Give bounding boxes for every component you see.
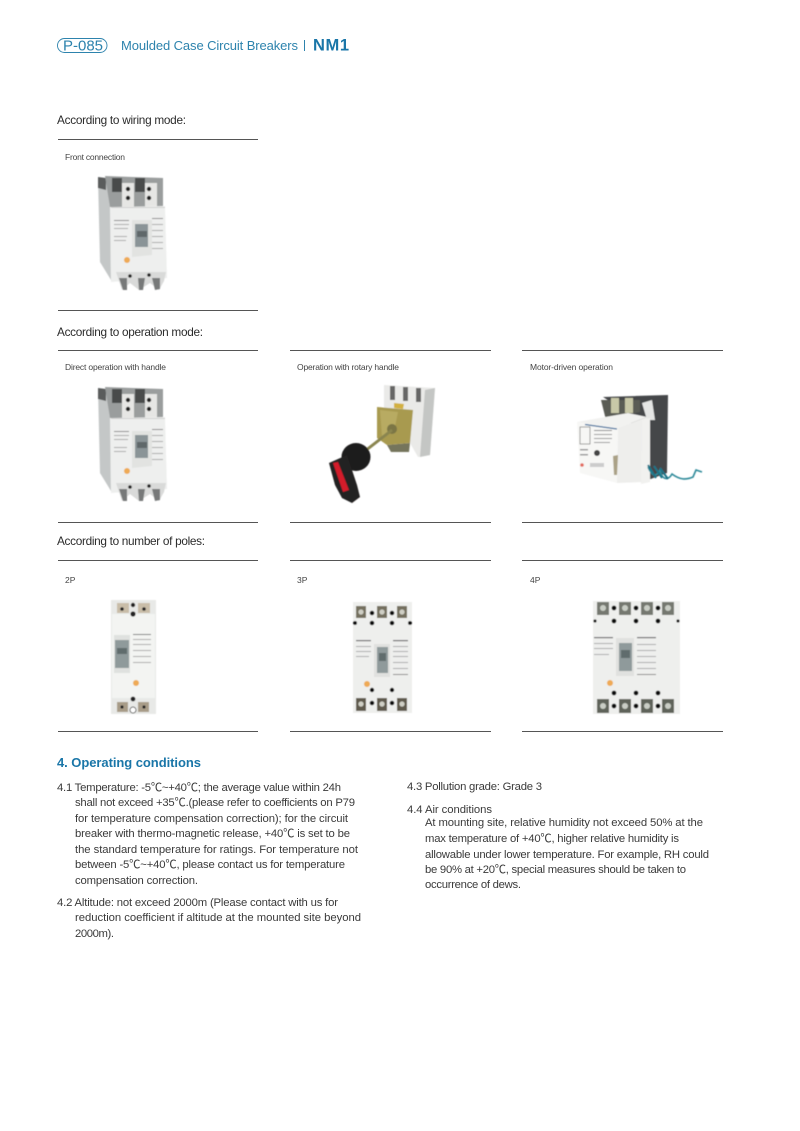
text block: conditions 4.2: 4.2 Altitude: not exceed 2000m (Please contact with us for <box>57 897 338 909</box>
text block: conditions 4.1: 4.1 Temperature: -5℃~+40℃; the average value within 24h <box>57 782 341 794</box>
text block: conditions 4.1: for temperature compensation correction); for the circuit <box>75 813 349 825</box>
page header: NM1 <box>313 36 349 54</box>
panel: front connection <box>58 140 258 310</box>
text block: conditions 4.4: max temperature of +40℃, higher relative humidity is <box>425 833 679 845</box>
text block: conditions 4.3: 4.3 Pollution grade: Grade 3 <box>407 781 542 793</box>
icon: motor-driven breaker <box>577 395 702 484</box>
panel: 3P <box>290 560 491 732</box>
page header <box>58 36 349 54</box>
panel: direct operation with handle <box>58 350 258 522</box>
icon: 2-pole breaker <box>111 600 156 714</box>
heading: wiring mode: According to wiring mode: <box>57 113 186 127</box>
panel: 4P: 4P <box>530 575 541 585</box>
text block: conditions 4.1: breaker with thermo-magnetic release, +40℃ is set to be <box>75 828 350 840</box>
icon: handle-operated breaker <box>98 387 167 501</box>
text block: conditions 4.2: reduction coefficient if altitude at the mounted site beyond <box>75 912 361 924</box>
text block: conditions 4.1: between -5℃~+40℃, please contact us for temperature <box>75 859 345 871</box>
heading: number of poles: According to number of poles: <box>57 534 205 548</box>
icon: 3-pole breaker <box>353 602 412 713</box>
panel: 2P <box>58 560 258 732</box>
text block: conditions 4.1: shall not exceed +35℃.(please refer to coefficients on P79 <box>75 797 355 809</box>
text block: conditions 4.1 <box>57 782 359 887</box>
section heading: operating conditions: 4. Operating conditions <box>57 755 201 770</box>
text block: conditions 4.2: 2000m). <box>75 928 114 940</box>
text block: conditions 4.1: the standard temperature for ratings. For temperature not <box>75 844 359 856</box>
page header: Moulded Case Circuit Breakers <box>121 38 298 53</box>
text block: conditions 4.2 <box>57 897 361 940</box>
heading: operation mode: According to operation mode: <box>57 325 203 339</box>
text block: conditions 4.4: At mounting site, relative humidity not exceed 50% at the <box>425 817 703 829</box>
text block: conditions 4.4: occurrence of dews. <box>425 879 521 891</box>
icon: front connection breaker <box>98 176 167 290</box>
panel: 3P: 3P <box>297 575 308 585</box>
panel: motor-driven operation: Motor-driven operation <box>530 362 613 372</box>
panel: direct operation with handle: Direct operation with handle <box>65 362 166 372</box>
panel: operation with rotary handle <box>290 350 491 522</box>
panel: 2P: 2P <box>65 575 76 585</box>
panel: front connection: Front connection <box>65 152 125 162</box>
panel: motor-driven operation <box>522 350 723 522</box>
text block: conditions 4.4: 4.4 Air conditions <box>407 804 492 816</box>
text block: conditions 4.1: compensation correction. <box>75 875 198 887</box>
icon: rotary handle breaker <box>329 385 435 503</box>
text block: conditions 4.4: allowable under lower temperature. For example, RH could <box>425 849 709 861</box>
icon: 4-pole breaker <box>593 601 680 714</box>
panel: operation with rotary handle: Operation with rotary handle <box>297 362 399 372</box>
text block: conditions 4.4: be 90% at +20℃, special measures should be taken to <box>425 864 686 876</box>
page header: P-085 <box>63 38 103 54</box>
text block: conditions 4.4 <box>407 804 709 891</box>
panel: 4P <box>522 560 723 732</box>
